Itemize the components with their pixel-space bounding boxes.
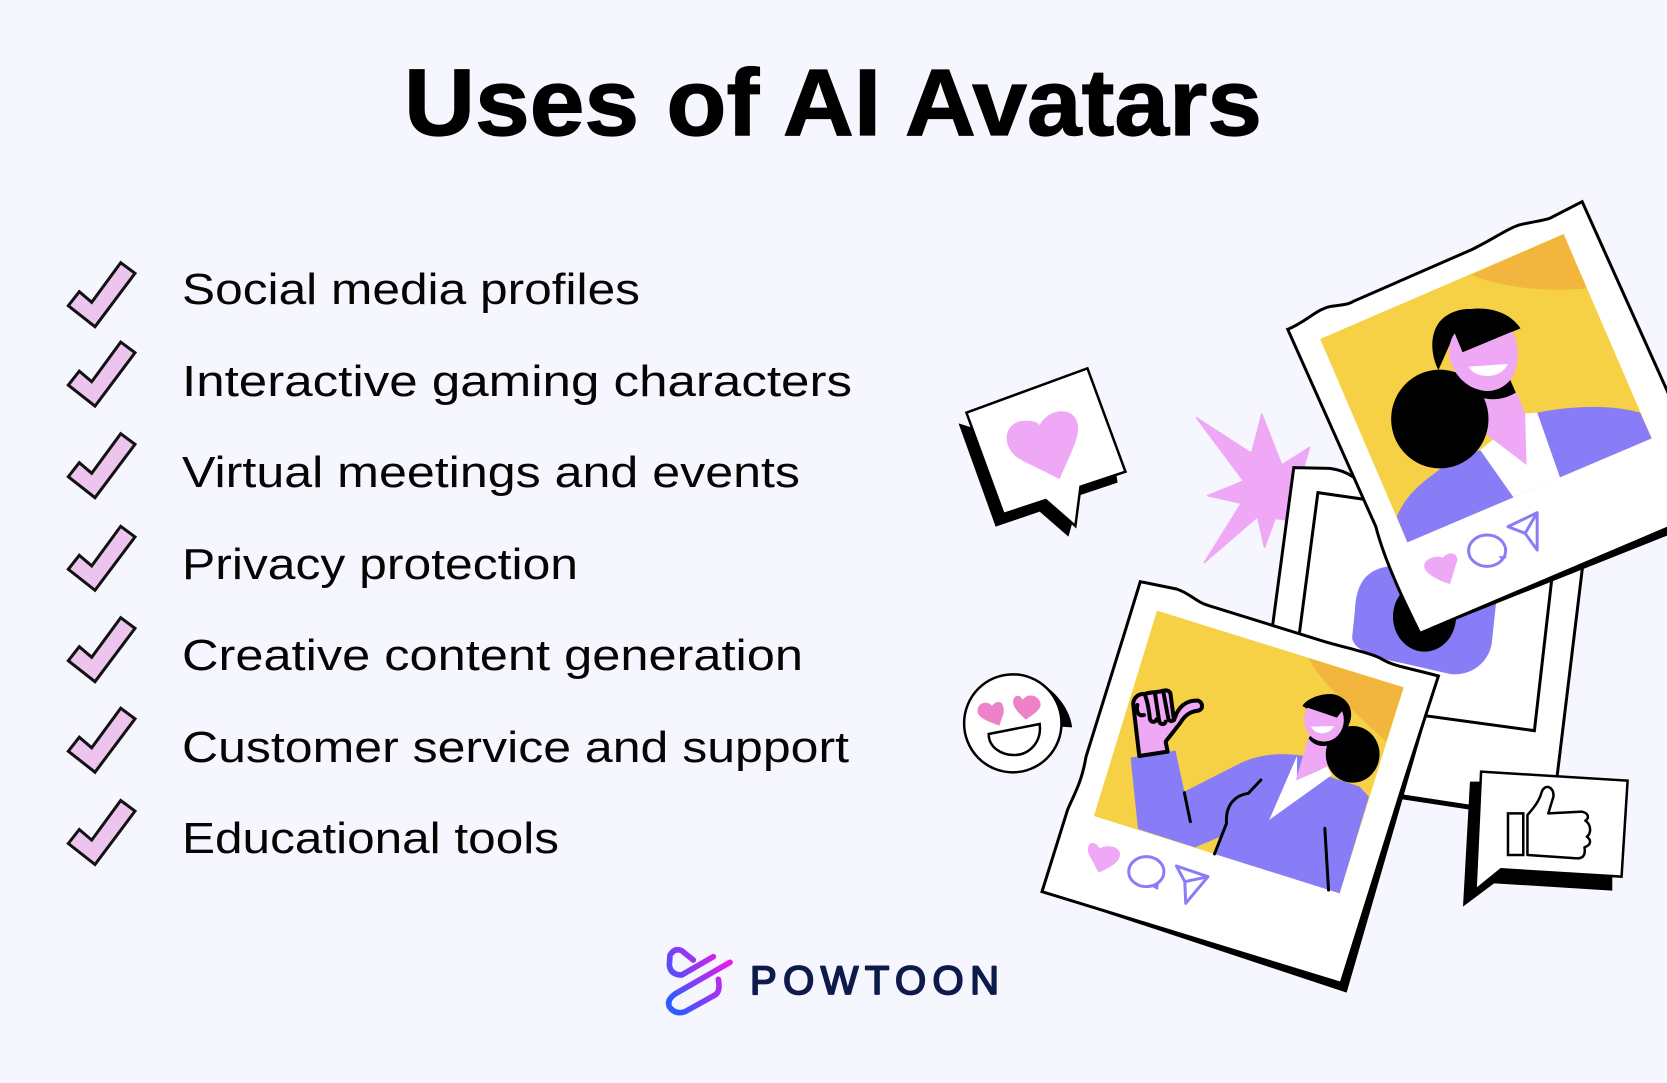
icon: send [1176,866,1208,903]
photo background [1094,611,1404,893]
item 2: Interactive gaming characters [182,357,852,406]
card shadow [1420,503,1667,634]
item 6: Customer service and support [182,723,849,772]
logo mark [669,950,730,1013]
figure [1131,690,1380,893]
icon: like [1424,553,1457,584]
illustration [959,202,1667,993]
hand [1133,690,1202,756]
icon: like [1088,843,1120,873]
icon: pink starburst [1196,414,1311,563]
icon: comment [1469,535,1508,566]
item 1: Social media profiles [182,265,640,314]
figure [1391,309,1652,542]
icon: heart eyes emoji [964,674,1072,772]
item 7: Educational tools [182,814,559,863]
panel: bottom photo card [1042,582,1438,993]
check icon 4 [68,526,135,590]
card frame [1042,582,1438,983]
item 3: Virtual meetings and events [182,448,800,497]
title: Uses of AI Avatars [404,50,1262,156]
check icon 5 [68,618,135,682]
item 5: Creative content generation [182,631,803,680]
logo wordmark: POWTOON [750,959,999,1003]
panel: top photo card [1288,202,1667,634]
check icon 2 [68,342,135,406]
check icon 3 [68,434,135,498]
icon: comment [1129,857,1164,890]
card frame [1288,202,1667,633]
icon: send [1508,513,1537,550]
check icon 1 [68,263,135,327]
panel: bottom group [964,582,1628,993]
checklist [68,263,852,864]
logo: Powtoon [669,950,999,1013]
panel: middle photo card [1265,468,1587,820]
item 4: Privacy protection [182,540,578,589]
card shadow [1042,680,1437,993]
icon: thumbs up speech bubble [1463,772,1628,907]
icon: heart speech bubble [959,368,1125,537]
check icon 6 [68,708,135,772]
photo background [1320,234,1652,542]
check icon 7 [68,800,135,864]
